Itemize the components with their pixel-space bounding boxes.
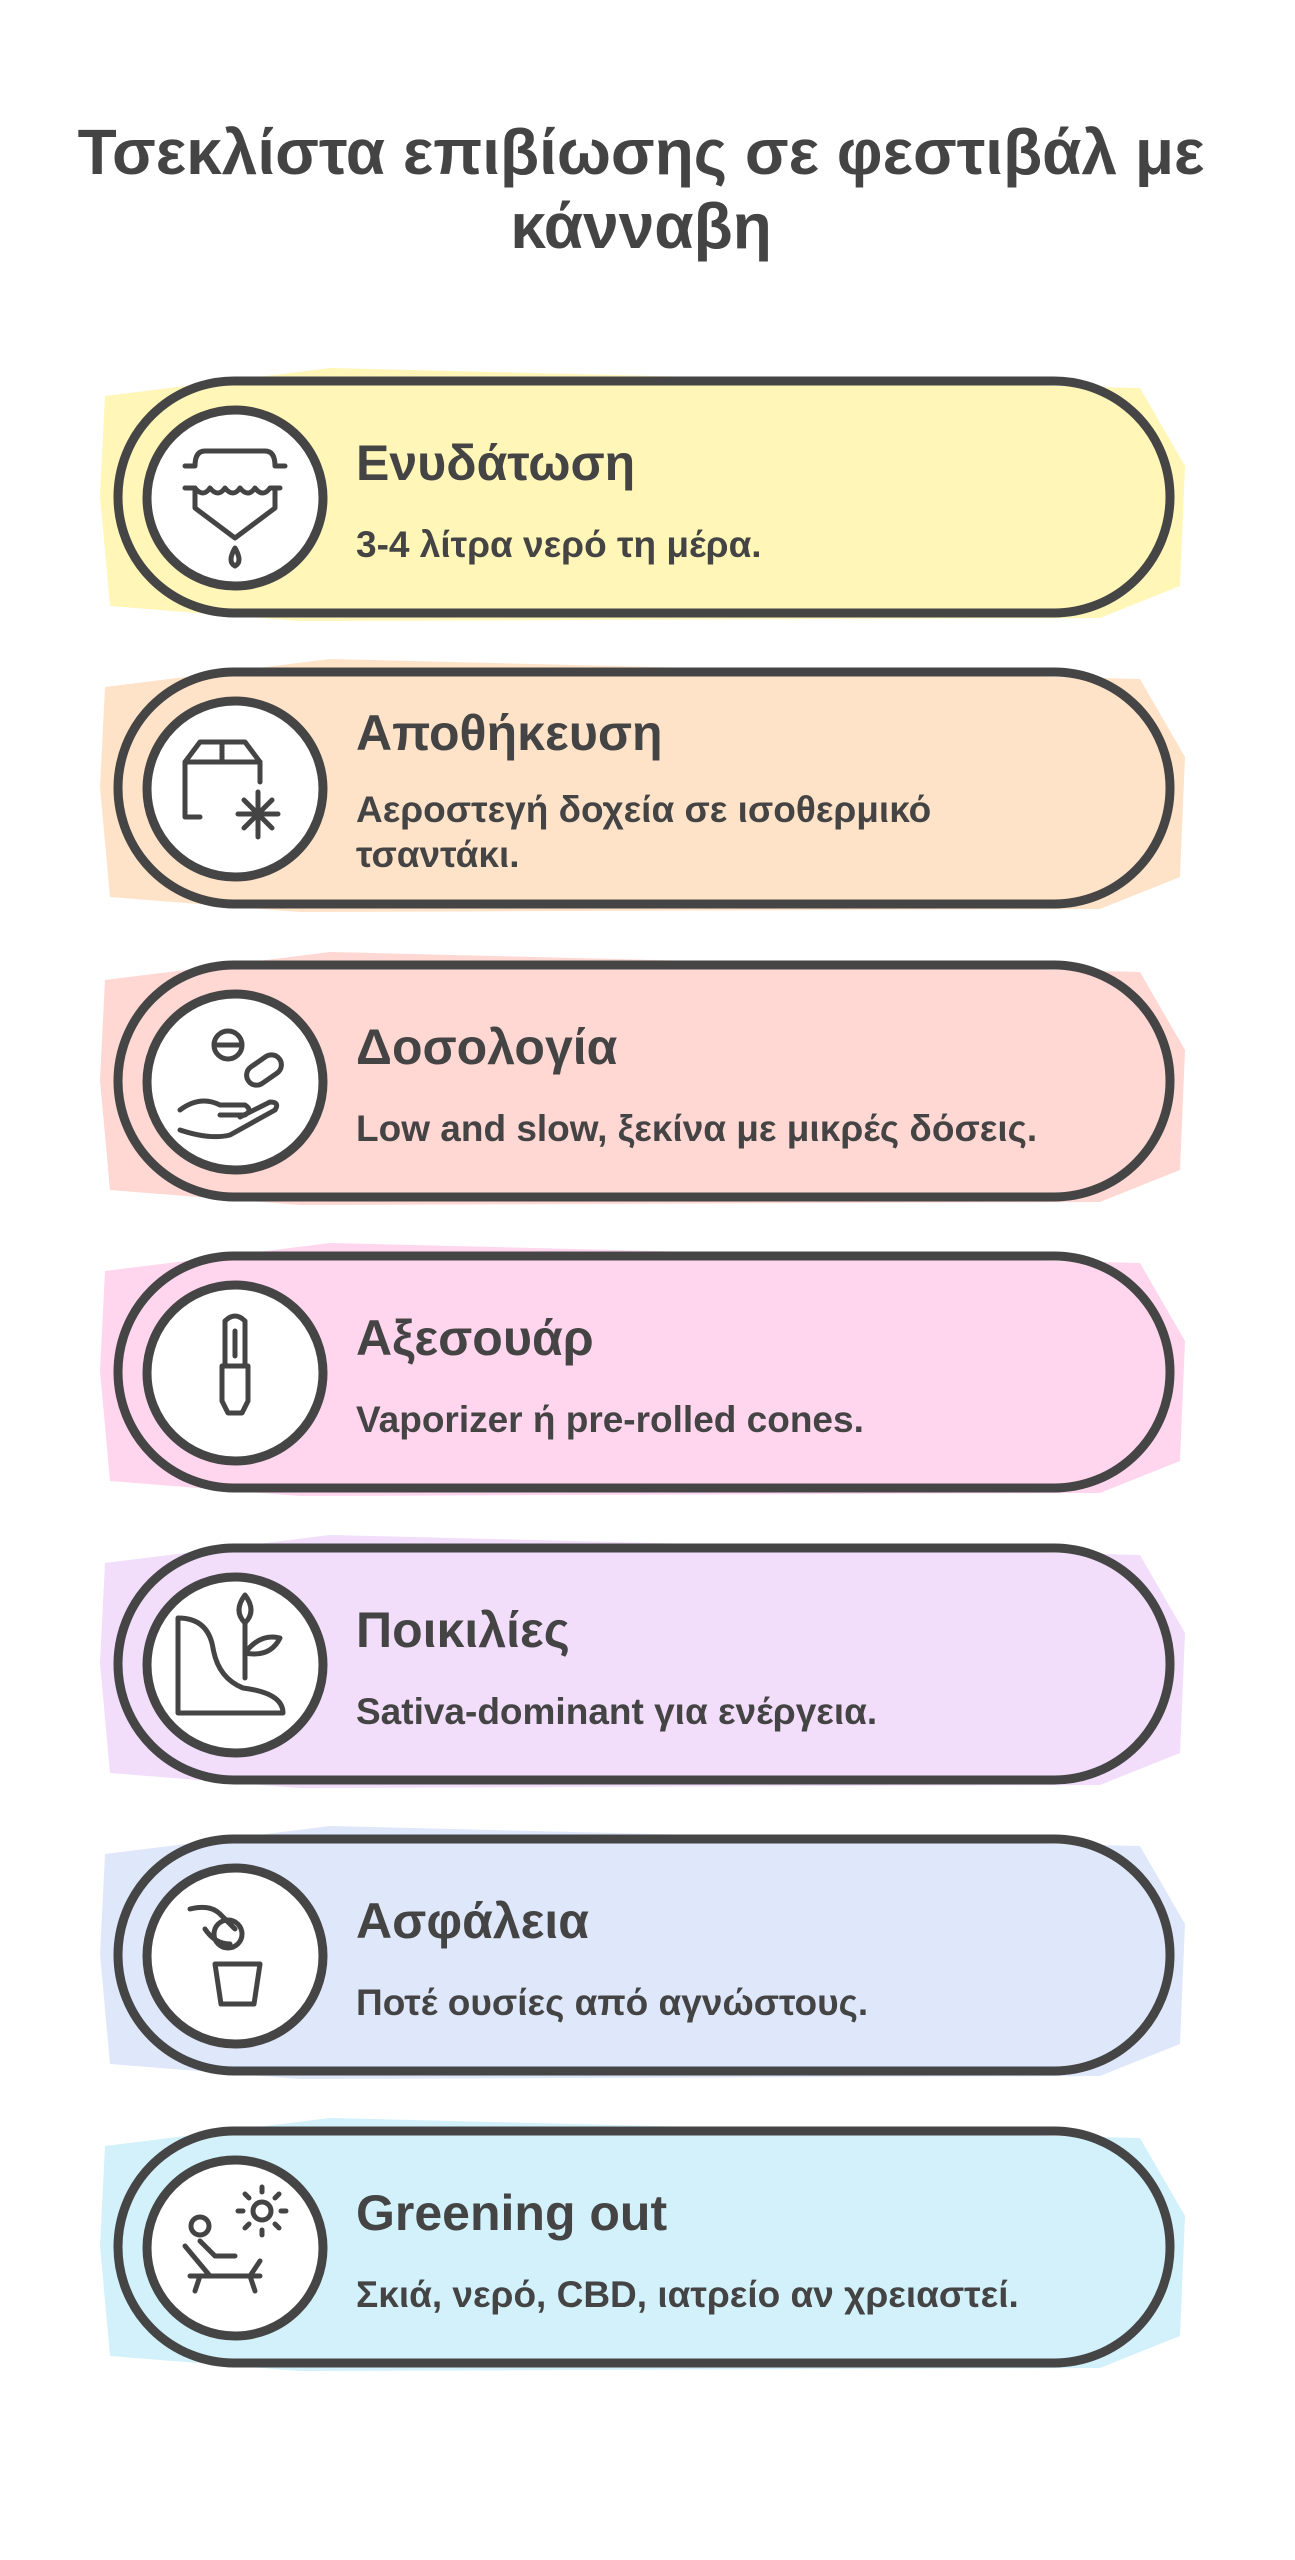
icon: plant	[178, 1595, 283, 1713]
heading: Αξεσουάρ	[356, 1310, 594, 1366]
icon: vaporizer	[222, 1316, 248, 1413]
title: κάνναβη	[510, 190, 772, 262]
icon: box with snowflake	[185, 742, 278, 837]
panel: storage: τσαντάκι.	[356, 834, 520, 875]
body: Σκιά, νερό, CBD, ιατρείο αν χρειαστεί.	[356, 2274, 1019, 2315]
panel: hydration	[100, 368, 1185, 621]
body: Αεροστεγή δοχεία σε ισοθερμικό	[356, 789, 931, 830]
heading: Greening out	[356, 2185, 667, 2241]
body: Sativa-dominant για ενέργεια.	[356, 1691, 877, 1732]
panel: greening out	[100, 2118, 1185, 2371]
body: Vaporizer ή pre-rolled cones.	[356, 1399, 864, 1440]
body: Ποτέ ουσίες από αγνώστους.	[356, 1982, 868, 2023]
panel: storage	[100, 659, 1185, 912]
body: Low and slow, ξεκίνα με μικρές δόσεις.	[356, 1108, 1037, 1149]
panel: accessories	[100, 1243, 1185, 1496]
heading: Ποικιλίες	[356, 1602, 570, 1658]
heading: Ασφάλεια	[356, 1893, 589, 1949]
title	[78, 116, 1204, 262]
icon: hand and cup	[190, 1907, 260, 2004]
panel: dosage	[100, 952, 1185, 1205]
panel: safety	[100, 1826, 1185, 2079]
body: 3-4 λίτρα νερό τη μέρα.	[356, 524, 762, 565]
icon: person in lounge chair with sun	[185, 2187, 286, 2291]
heading: Αποθήκευση	[356, 705, 663, 761]
icon: pills in hand	[180, 1031, 285, 1137]
heading: Δοσολογία	[356, 1019, 618, 1075]
panel: strains	[100, 1535, 1185, 1788]
icon: water	[185, 451, 285, 566]
heading: Ενυδάτωση	[356, 435, 635, 491]
title: Τσεκλίστα επιβίωσης σε φεστιβάλ με	[78, 116, 1204, 188]
